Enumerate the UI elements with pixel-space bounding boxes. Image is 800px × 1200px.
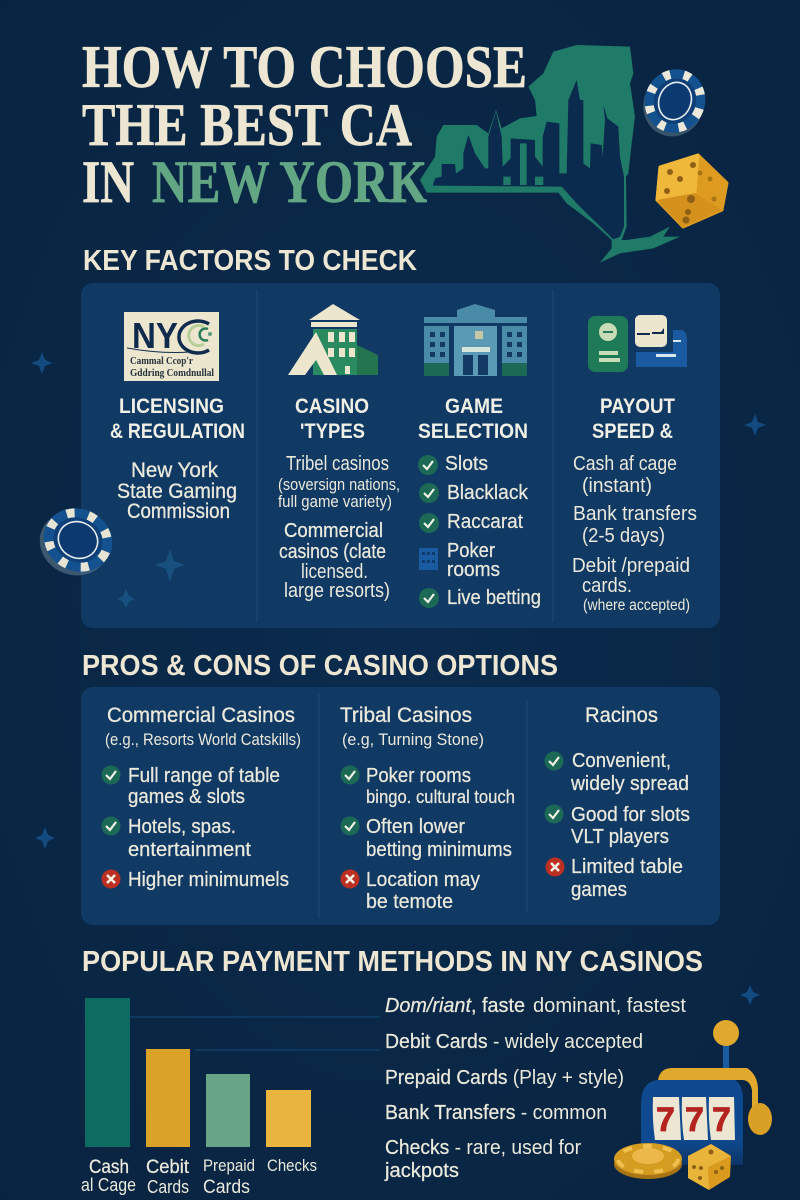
text: game selection: Poker: [447, 540, 495, 562]
heading: payment methods: POPULAR PAYMENT METHODS IN NY CASINOS: [82, 946, 703, 978]
text: casino types: large resorts): [284, 580, 390, 602]
decoration: sparkles: [31, 352, 766, 1005]
bar chart: payment methods: Cebit: [146, 1157, 190, 1178]
icon: slot machine: 7: [685, 1101, 704, 1139]
text: payout speed: PAYOUT: [600, 394, 675, 418]
text: licensing: & REGULATION: [110, 419, 245, 443]
column: racinos: VLT players: [571, 826, 669, 848]
column: racinos: Limited table: [571, 856, 683, 878]
text: payout speed: (2-5 days): [582, 525, 665, 547]
text: casino types: full game variety): [278, 492, 392, 511]
column: racinos: [544, 704, 690, 901]
column: commercial casinos: entertainment: [128, 839, 251, 861]
text: payout speed: cards.: [582, 575, 632, 597]
text: payout speed: [572, 394, 697, 614]
text: casino types: Commercial: [284, 520, 383, 542]
column: commercial casinos: Hotels, spas.: [128, 816, 236, 838]
panel: pros and cons: [81, 687, 720, 925]
bar chart: payment methods: Prepaid: [203, 1156, 255, 1175]
text: game selection: rooms: [447, 559, 500, 581]
column: tribal casinos: Often lower: [366, 816, 465, 838]
icon: licensing badge: Gddring Comdnullal: [130, 367, 214, 379]
heading: key factors: KEY FACTORS TO CHECK: [83, 245, 417, 277]
column: tribal casinos: Location may: [366, 869, 480, 891]
text: payout speed: Cash af cage: [573, 453, 677, 475]
text: payout speed: SPEED &: [592, 419, 673, 443]
column: commercial casinos: (e.g., Resorts World Catskills): [105, 730, 301, 749]
title: NEW YORK: [152, 149, 427, 215]
text: licensing: Commission: [127, 500, 230, 523]
column: tribal casinos: Poker rooms: [366, 765, 471, 787]
icon: licensing badge: NY: [132, 315, 178, 356]
illustration: New York state map and skyline: [420, 45, 680, 263]
icon: poker chip left: [29, 496, 123, 587]
column: racinos: Racinos: [585, 704, 658, 727]
text: casino types: licensed.: [301, 561, 368, 583]
bar chart: payment methods: Cards: [203, 1177, 250, 1198]
text: payment method list: Debit Cards - widely accepted: [385, 1031, 643, 1053]
text: game selection: SELECTION: [418, 419, 528, 443]
column: racinos: widely spread: [570, 773, 689, 795]
text: game selection: Raccarat: [447, 511, 523, 533]
text: payment method list: Dom/riant, faste: [385, 995, 525, 1017]
icon: licensing badge: Cammal Ccop'r: [130, 355, 193, 367]
text: payout speed: (instant): [582, 475, 652, 497]
title: THE BEST CA: [82, 92, 412, 158]
column: tribal casinos: bingo. cultural touch: [366, 787, 515, 807]
text: payment method list: Checks - rare, used for: [385, 1137, 581, 1159]
icon: poker chip top: [634, 60, 715, 146]
title: HOW TO CHOOSE: [82, 34, 527, 100]
column: commercial casinos: games & slots: [128, 786, 245, 808]
icon: slot machine: 7: [656, 1101, 675, 1139]
title: [82, 34, 527, 215]
column: commercial casinos: Full range of table: [128, 765, 280, 787]
text: casino types: CASINO: [295, 394, 369, 418]
text: payment method list: [384, 995, 686, 1182]
column: tribal casinos: Tribal Casinos: [340, 704, 472, 727]
text: game selection: GAME: [445, 394, 503, 418]
bar chart: payment methods: [81, 998, 380, 1198]
text: payment method list: Bank Transfers - common: [385, 1102, 607, 1124]
column: racinos: Good for slots: [571, 804, 690, 826]
column: tribal casinos: (e.g, Turning Stone): [342, 730, 484, 749]
text: payout speed: Bank transfers: [573, 503, 697, 525]
bar chart: payment methods: Cash: [89, 1157, 129, 1178]
text: licensing: New York: [131, 459, 218, 482]
text: casino types: 'TYPES: [300, 419, 365, 443]
icon: casino types building: [288, 304, 378, 375]
text: licensing: [110, 394, 245, 523]
column: tribal casinos: betting minimums: [366, 839, 512, 861]
text: payout speed: (where accepted): [583, 597, 690, 614]
text: casino types: [278, 394, 400, 602]
title: IN: [82, 149, 134, 215]
text: game selection: Blacklack: [447, 482, 529, 504]
text: licensing: State Gaming: [117, 480, 237, 503]
column: tribal casinos: [340, 704, 515, 913]
heading: pros and cons: PROS & CONS OF CASINO OPTIONS: [82, 650, 558, 682]
column: commercial casinos: Higher minimumels: [128, 869, 289, 891]
icon: slot machine: 7: [712, 1101, 731, 1139]
text: payout speed: Debit /prepaid: [572, 555, 690, 577]
text: payment method list: Prepaid Cards (Play + style): [385, 1067, 624, 1089]
text: casino types: (soversign nations,: [278, 475, 400, 494]
icon: licensing badge: [124, 312, 219, 381]
text: payment method list: dominant, fastest: [533, 995, 686, 1017]
text: game selection: Live betting: [447, 587, 541, 609]
column: tribal casinos: be temote: [366, 891, 453, 913]
bar chart: payment methods: al Cage: [81, 1175, 136, 1195]
icon: yellow die top: [657, 155, 727, 227]
panel: key factors: [81, 283, 720, 628]
text: game selection: Slots: [445, 453, 488, 475]
icon: payout cards: [588, 315, 687, 372]
text: game selection: [418, 394, 541, 609]
column: racinos: Convenient,: [572, 750, 671, 772]
bar chart: payment methods: Cards: [147, 1177, 189, 1197]
text: licensing: LICENSING: [119, 394, 224, 418]
text: casino types: Tribel casinos: [286, 453, 389, 475]
text: payment method list: jackpots: [384, 1160, 459, 1182]
icon: slot machine: [614, 1020, 772, 1190]
column: commercial casinos: Commercial Casinos: [107, 704, 295, 727]
column: commercial casinos: [102, 704, 301, 891]
text: casino types: casinos (clate: [279, 541, 386, 563]
bar chart: payment methods: Checks: [267, 1156, 317, 1175]
icon: game selection building: [424, 304, 527, 376]
column: racinos: games: [571, 879, 627, 901]
